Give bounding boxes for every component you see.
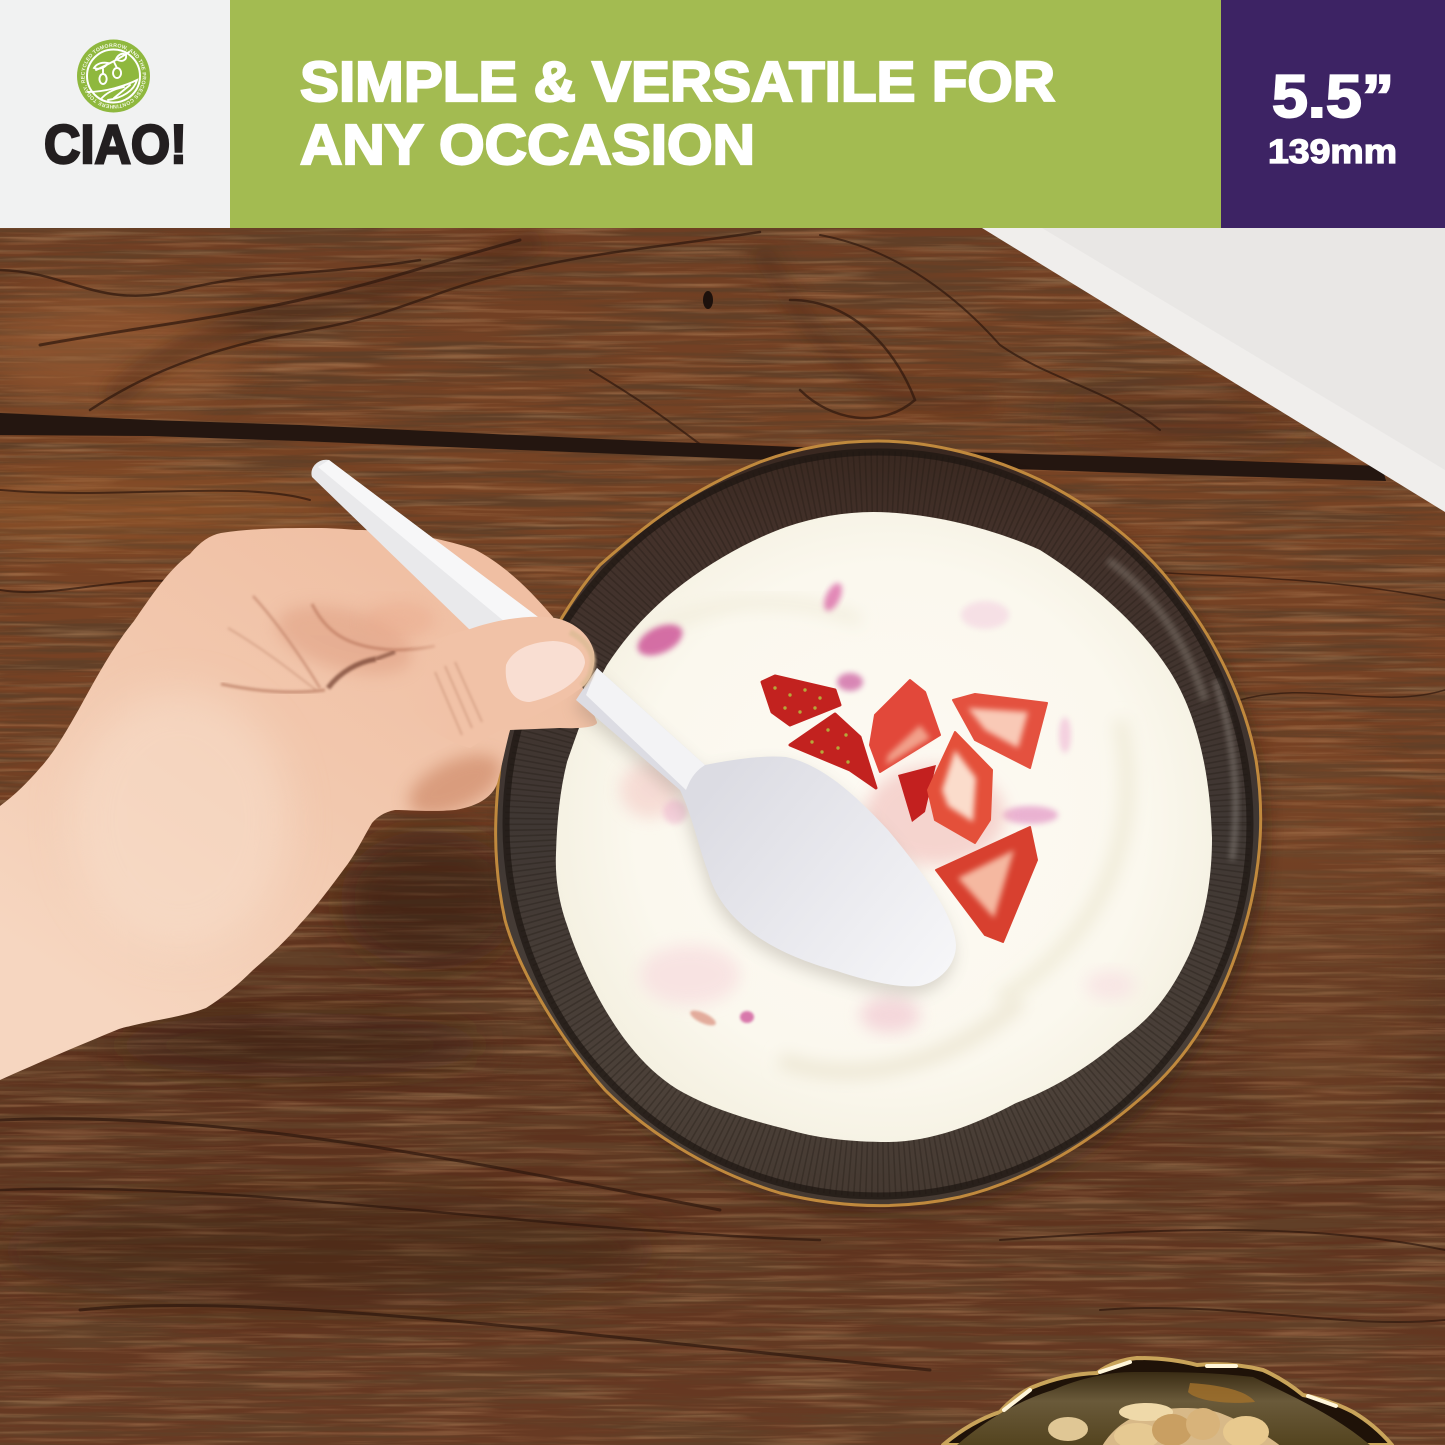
headline text — [300, 50, 1055, 177]
strawberry: seeded pieces — [762, 676, 876, 788]
strawberries — [762, 676, 1047, 942]
headline text: SIMPLE & VERSATILE FOR — [300, 50, 1055, 114]
size in inches: 5.5” — [1272, 63, 1394, 130]
plastic spoon: bowl and lower handle — [574, 668, 956, 994]
white paper sheet in corner — [982, 228, 1445, 512]
header: logo panel — [0, 0, 230, 228]
second bowl with granola at bottom right — [943, 1358, 1392, 1445]
header: headline panel — [230, 0, 1221, 228]
knot in wood — [703, 291, 713, 309]
header: size panel — [1221, 0, 1445, 228]
dark glass bowl with gold rim — [496, 441, 1267, 1213]
plastic spoon: upper handle — [311, 460, 538, 630]
logo badge: olive branch — [77, 40, 150, 112]
headline text: ANY OCCASION — [300, 113, 755, 177]
hand holding the spoon — [0, 528, 597, 1080]
plank gap — [0, 413, 1386, 481]
brand wordmark: CIAO! — [44, 113, 187, 175]
yogurt in the bowl — [556, 512, 1212, 1142]
size in millimetres: 139mm — [1268, 133, 1397, 171]
thumb over handle with nail — [405, 617, 594, 748]
